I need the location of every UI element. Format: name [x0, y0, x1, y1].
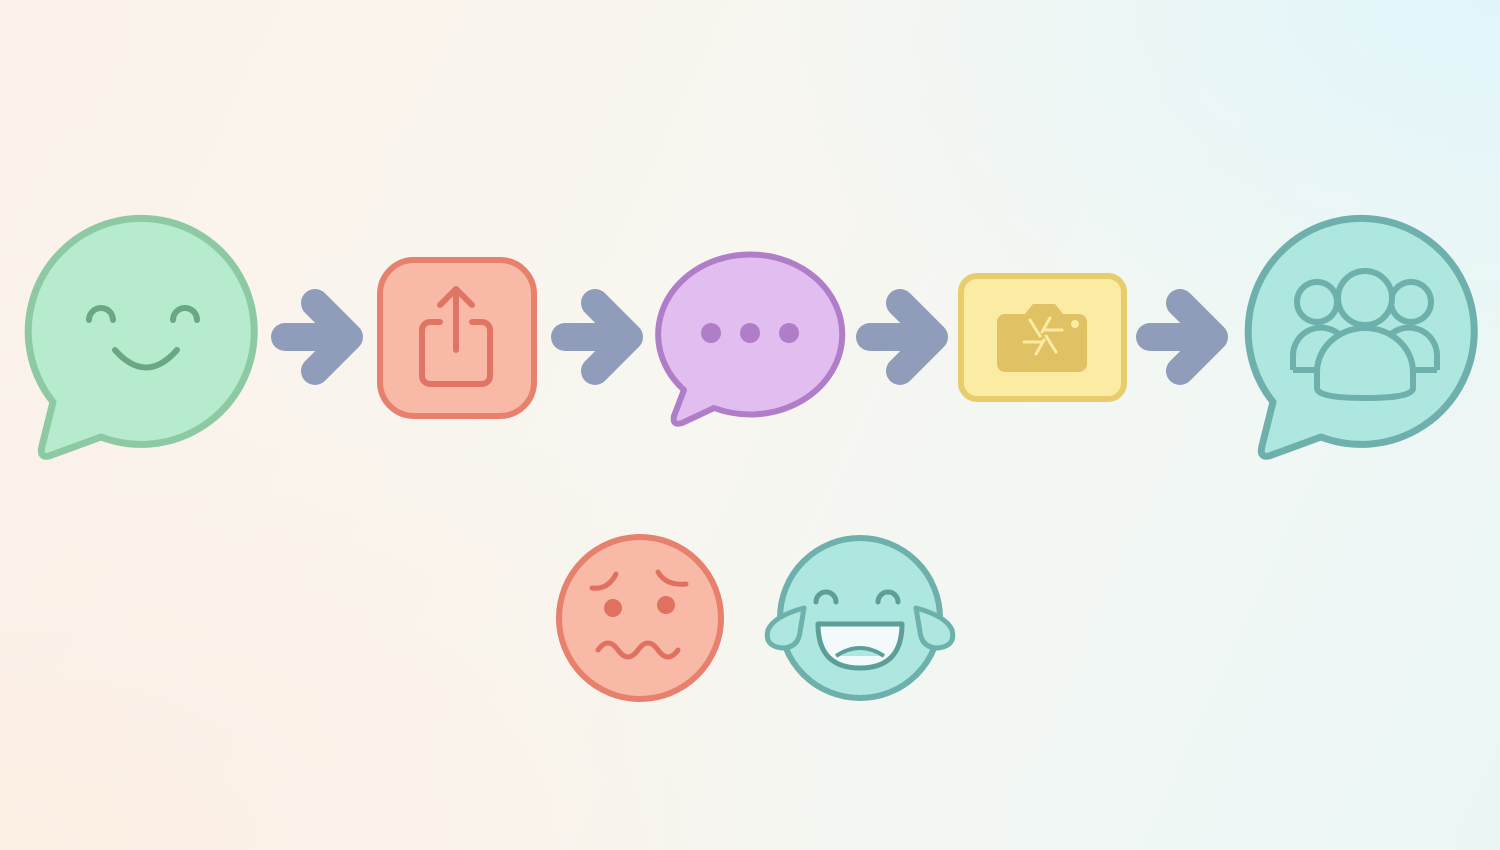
icon: teal group bubble: [1248, 218, 1474, 456]
icon: red share box: [380, 260, 534, 416]
icon: purple typing bubble: [658, 254, 842, 424]
arrow 1: [285, 303, 349, 371]
icon: worried red face: [559, 537, 721, 699]
arrow 2: [565, 303, 629, 371]
icon: teal laughing face: [767, 538, 953, 698]
icon: yellow camera card: [961, 276, 1124, 399]
icon: green smiling speech bubble: [28, 218, 254, 456]
arrow 3: [870, 303, 934, 371]
arrow 4: [1150, 303, 1214, 371]
